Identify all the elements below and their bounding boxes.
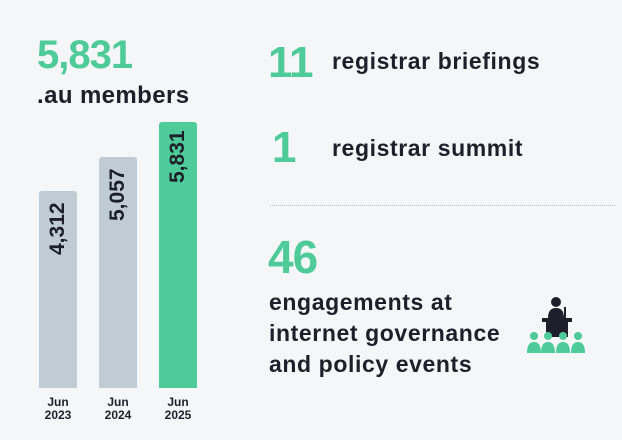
label 2025: Jun bbox=[167, 395, 189, 409]
label 2023: 2023 bbox=[45, 408, 71, 422]
label 2024: Jun bbox=[107, 395, 129, 409]
label 2025: 2025 bbox=[165, 408, 191, 422]
label 2023 bbox=[45, 395, 71, 422]
bar 2023 bbox=[39, 191, 77, 388]
label 2024 bbox=[105, 395, 132, 422]
stat: 11 briefings: registrar briefings bbox=[332, 48, 540, 74]
text: engagements: engagements at bbox=[269, 289, 453, 315]
stat: 1 summit bbox=[272, 123, 523, 172]
label 2023: Jun bbox=[47, 395, 69, 409]
text: engagements bbox=[269, 289, 500, 377]
bar 2023: 4,312 bbox=[46, 202, 69, 255]
stat: 11 briefings bbox=[268, 38, 540, 87]
stat: 11 briefings: 11 bbox=[268, 38, 313, 87]
icon: speaker and audience bbox=[527, 297, 585, 353]
label 2024: 2024 bbox=[105, 408, 131, 422]
heading: members count: 5,831 bbox=[37, 33, 132, 77]
text: engagements: internet governance bbox=[269, 320, 500, 346]
heading: .au members: .au members bbox=[37, 82, 189, 109]
stat: 1 summit: 1 bbox=[272, 123, 296, 172]
bar chart bbox=[39, 122, 197, 422]
stat: 1 summit: registrar summit bbox=[332, 135, 523, 161]
bar 2025 bbox=[159, 122, 197, 388]
stat: 46: 46 bbox=[268, 231, 317, 283]
label 2025 bbox=[165, 395, 191, 422]
bar 2024 bbox=[99, 157, 137, 388]
text: engagements: and policy events bbox=[269, 351, 472, 377]
bar 2024: 5,057 bbox=[106, 168, 129, 221]
bar 2025: 5,831 bbox=[166, 130, 189, 183]
